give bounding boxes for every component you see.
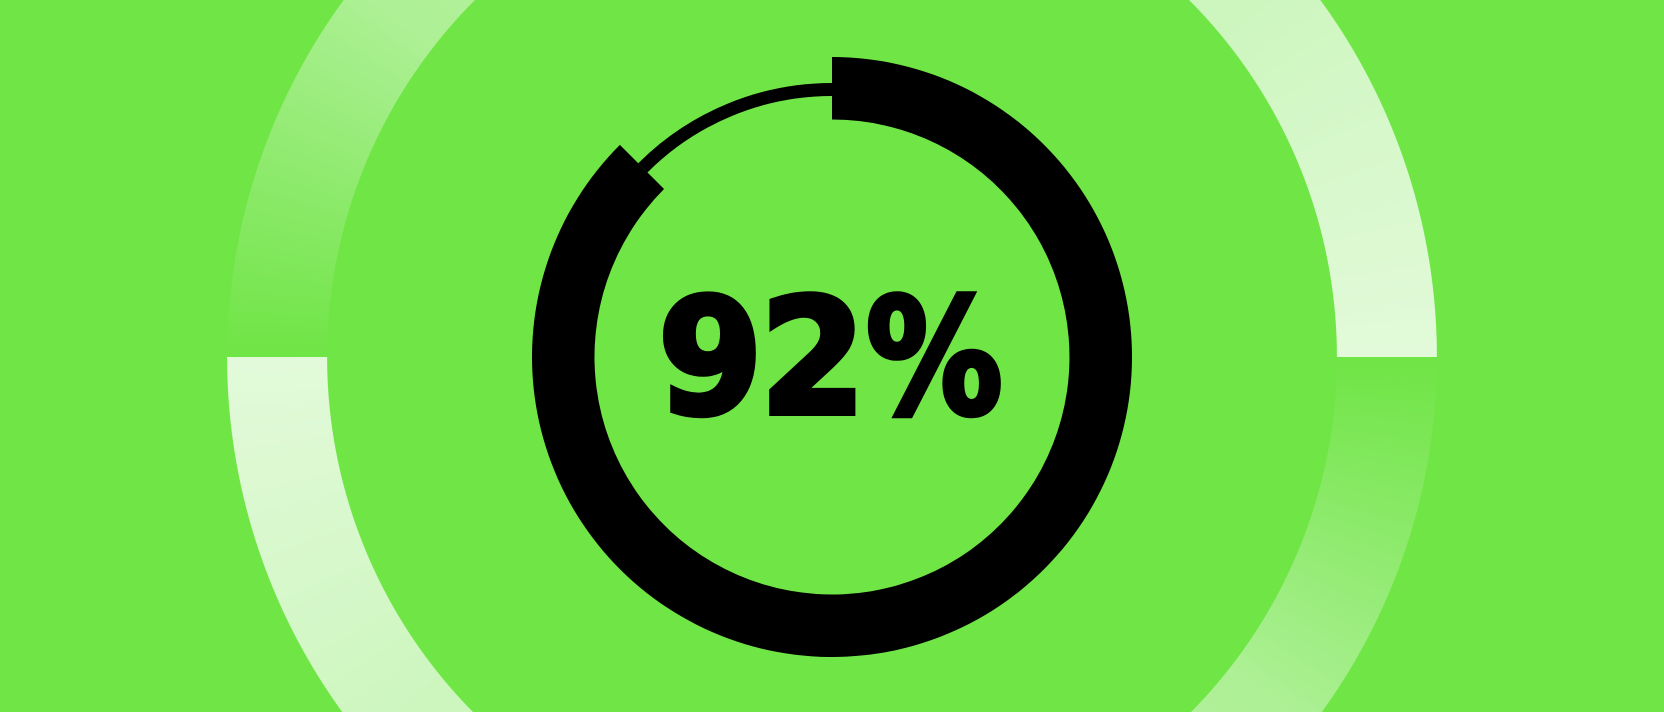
thick progress arc bbox=[532, 57, 1132, 657]
decorative outer ring: bottom half arc fading from left to right bbox=[227, 357, 1437, 712]
percentage value: % bbox=[866, 266, 1003, 452]
percentage value bbox=[658, 264, 1003, 452]
percentage value: 2 bbox=[760, 264, 866, 451]
percentage value: 9 bbox=[658, 265, 763, 451]
thin remainder arc bbox=[643, 90, 832, 168]
decorative outer ring: top half arc fading from right to left bbox=[227, 0, 1437, 357]
